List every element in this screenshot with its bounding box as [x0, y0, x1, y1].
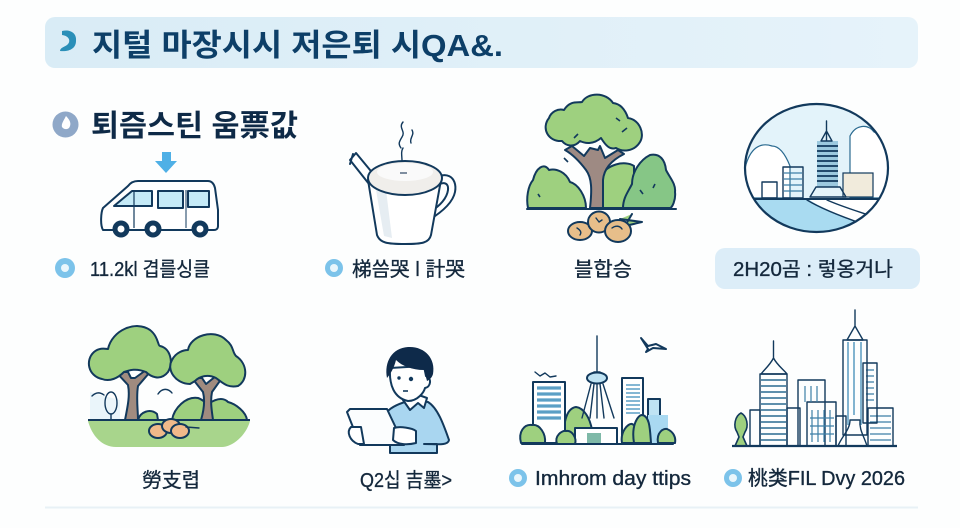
panel: high-rise skyline: [724, 310, 905, 490]
icon: city in circle: [745, 104, 889, 240]
label: person: Q2십 吉墨>: [360, 469, 452, 492]
icon: van: [101, 181, 218, 238]
panel: two trees: [88, 326, 250, 492]
callout pill: [715, 248, 920, 289]
title text: 지털 마장시시 저은퇴 시QA&.: [92, 28, 503, 63]
panel: park tree: [527, 95, 676, 281]
icon: tower skyline: [520, 336, 675, 444]
heading text: 퇴즘스틴 움票값: [91, 110, 298, 143]
label: cup: 梯씀哭 ǀ 計哭: [352, 258, 465, 281]
label: tree: 블합승: [574, 258, 632, 281]
icon: tree and bushes: [527, 95, 676, 209]
icon: high-rise skyline: [732, 310, 897, 446]
panel: person with tablet: [347, 347, 452, 492]
icon: nuts: [568, 212, 642, 242]
label: van: [55, 258, 210, 281]
label: day 2026: 桃类FIL Dvy 2026: [748, 467, 905, 490]
icon: cup: [350, 122, 455, 244]
label: trees: 勞支렵: [142, 469, 200, 492]
panel: city circle: [715, 104, 920, 289]
label: van: 11.2kl 겹를싱클: [90, 258, 210, 281]
title banner: [45, 17, 918, 68]
icon: title crescent: [60, 30, 76, 51]
icon: person reading tablet: [347, 347, 449, 453]
icon: trees on lawn: [88, 326, 250, 447]
icon: bird: [641, 338, 666, 352]
panel: tower skyline: [509, 336, 691, 490]
panel: van: [55, 152, 218, 281]
panel: cup: [325, 122, 465, 281]
section heading: [52, 110, 298, 143]
callout pill: 2H20곰 : 렇옹거나: [733, 258, 893, 281]
icon: down arrow: [155, 152, 177, 173]
label: tips: Imhrom day ttips: [535, 468, 691, 490]
